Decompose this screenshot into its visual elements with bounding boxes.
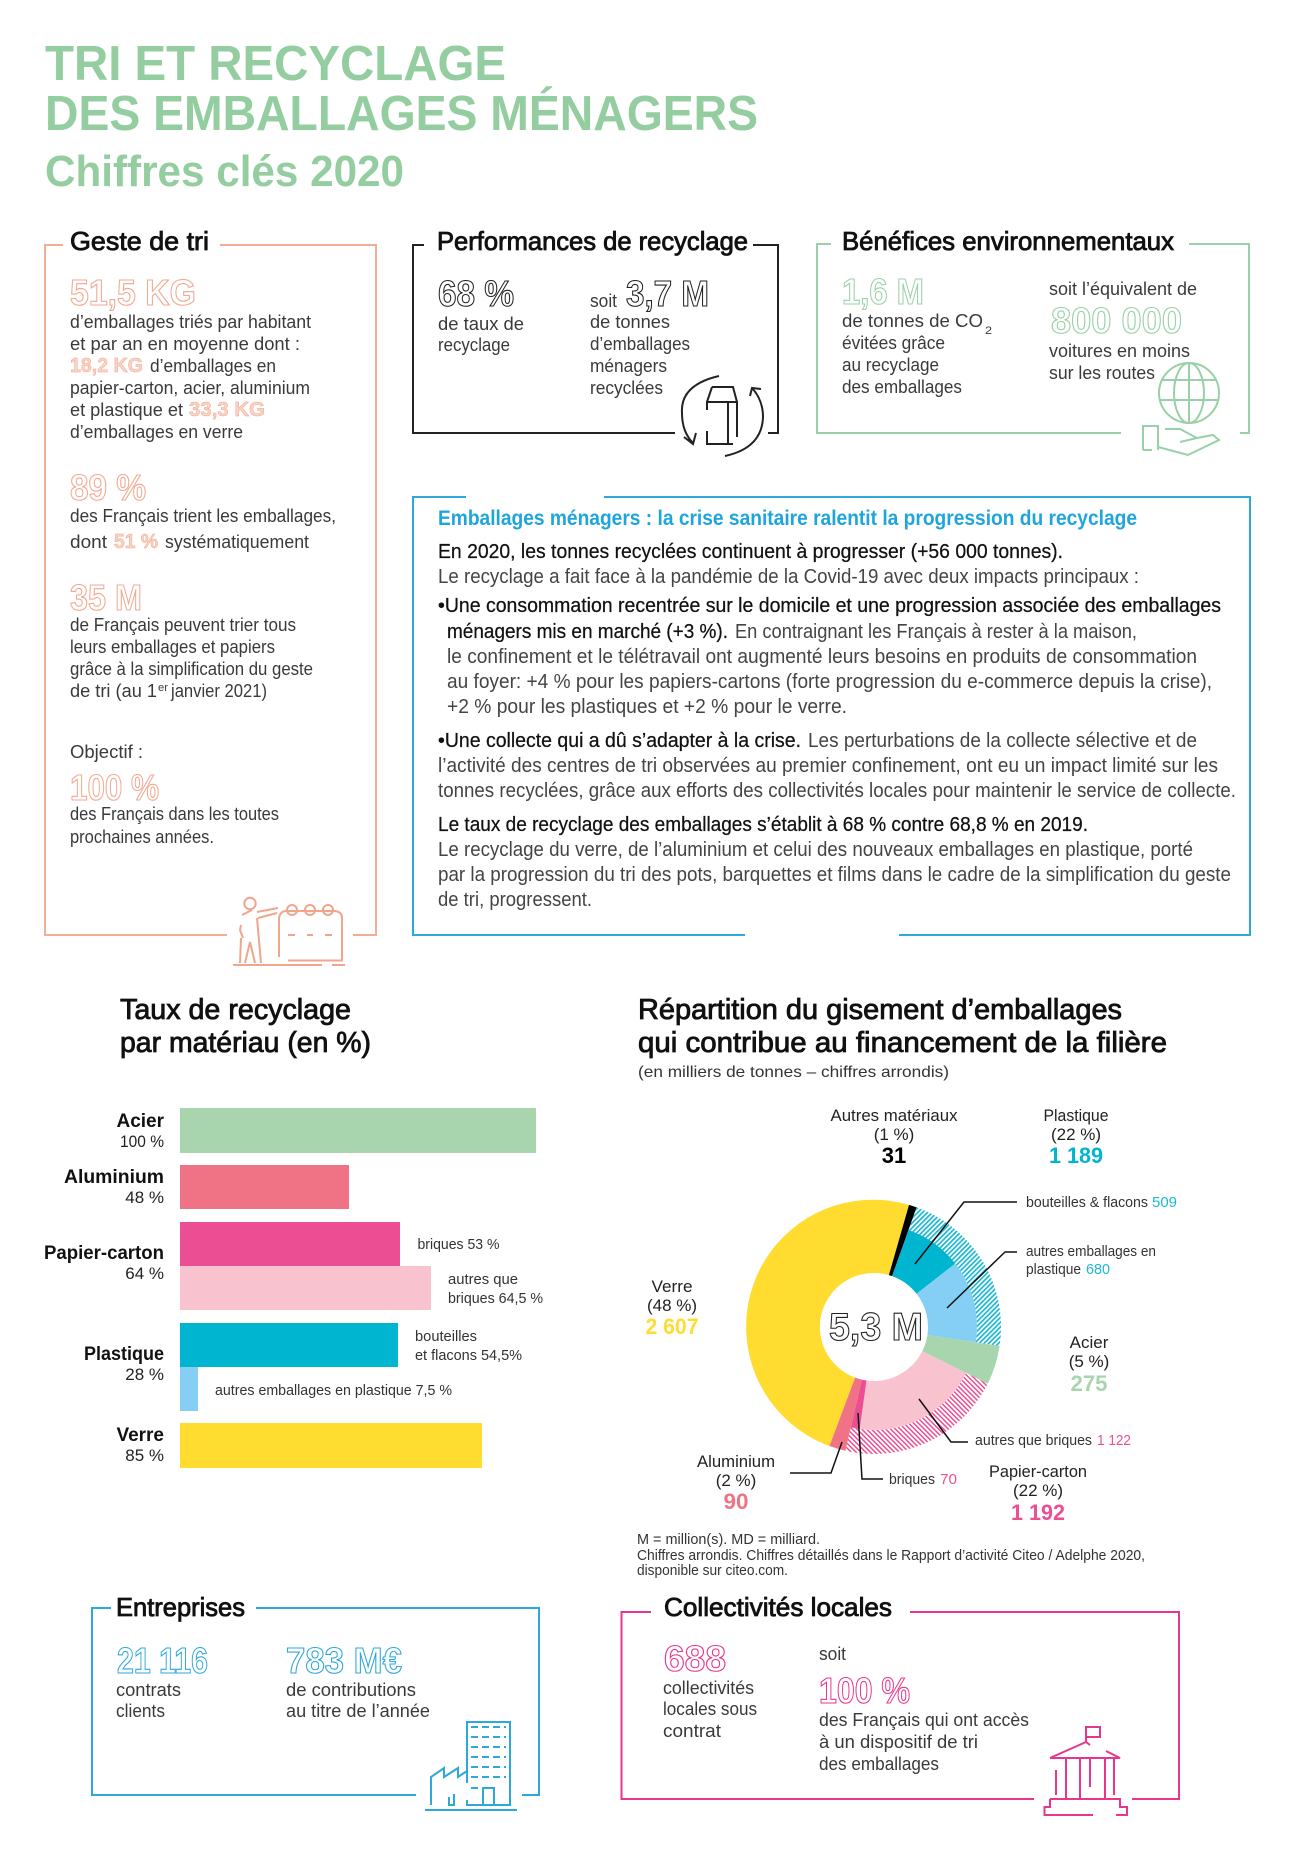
- stat: 51,5 KG: 33,3 KG: [189, 399, 265, 421]
- text block: taux de recyclage: de tri, progressent.: [438, 889, 592, 911]
- label: Verre: Verre: [652, 1277, 692, 1296]
- stat: 35 M: de Français peuvent trier tous: [70, 615, 296, 635]
- icon: office and factory: [425, 1722, 517, 1810]
- label: autres que briques: autres que briques: [975, 1432, 1092, 1449]
- icon: person sorting at a bin: [233, 898, 345, 965]
- bar: Plastique: et flacons 54,5%: [415, 1347, 522, 1364]
- text block: collecte: •Une collecte qui a dû s’adapter à la crise.: [438, 730, 801, 752]
- text block: collecte: l’activité des centres de tri observées au premier confinement, ont eu un impact limité sur les: [438, 755, 1218, 777]
- label: Papier-carton: 1 192: [1011, 1500, 1065, 1525]
- text block: consommation: ménagers mis en marché (+3 %).: [447, 621, 728, 643]
- stat: 35 M: 35 M: [70, 577, 142, 618]
- label: bouteilles et flacons: bouteilles & flacons: [1026, 1194, 1148, 1211]
- stat: 100 %: soit: [819, 1644, 846, 1664]
- label: Plastique: (22 %): [1051, 1125, 1101, 1144]
- panel: Geste de tri: [45, 226, 376, 965]
- stat: 1,6 M: évitées grâce: [842, 333, 945, 353]
- text block: consommation: En contraignant les Français à rester à la maison,: [735, 621, 1137, 643]
- stat: 35 M: grâce à la simplification du geste: [70, 659, 313, 679]
- panel: Bénéfices environnementaux: [817, 226, 1249, 455]
- leader lines: [790, 1202, 1017, 1479]
- stat: 1,6 M: 2: [985, 325, 992, 337]
- heading: taux de recyclage par matériau: par matériau (en %): [120, 1027, 371, 1059]
- stat: 21 116: contrats: [116, 1680, 181, 1700]
- heading: Collectivités locales: Collectivités locales: [664, 1592, 892, 1622]
- label: briques: briques: [889, 1471, 935, 1488]
- stat: 51,5 KG: d’emballages en verre: [70, 422, 243, 442]
- text block: consommation: [438, 595, 1221, 718]
- label: autres emballages en plastique: autres emballages en: [1026, 1243, 1156, 1260]
- heading: Geste de tri: Geste de tri: [70, 226, 209, 256]
- stat: 89 %: 51 %: [114, 531, 158, 553]
- panel: Performances de recyclage: [413, 226, 778, 456]
- stat: 783 M€: 783 M€: [286, 1640, 402, 1681]
- panel: Collectivités locales: [622, 1592, 1179, 1815]
- text block: introduction: En 2020, les tonnes recyclées continuent à progresser (+56 000 tonnes).: [438, 541, 1063, 563]
- stat: 89 %: des Français trient les emballages,: [70, 506, 336, 526]
- stat: 783 M€: [286, 1640, 430, 1721]
- label: Acier: [1069, 1333, 1109, 1396]
- stat: 51,5 KG: papier-carton, acier, aluminium: [70, 378, 310, 398]
- label: autres emballages en plastique: 680: [1086, 1261, 1110, 1278]
- stat: 3,7 M: d’emballages: [590, 334, 690, 354]
- stat: 89 %: 89 %: [70, 467, 146, 508]
- label: autres emballages en plastique: [1026, 1243, 1156, 1278]
- label: Autres matériaux: (1 %): [874, 1125, 914, 1144]
- bar: Acier: Acier: [116, 1111, 165, 1132]
- footnote: Chiffres arrondis. Chiffres détaillés dans le Rapport d’activité Citeo / Adelphe 2020,: [637, 1547, 1145, 1564]
- stat: 21 116: 21 116: [117, 1640, 208, 1681]
- heading: crise sanitaire: Emballages ménagers : la crise sanitaire ralentit la progression du recyclage: [438, 507, 1137, 530]
- bar: Aluminium: 48 %: [125, 1188, 164, 1207]
- stat: 35 M: janvier 2021): [170, 681, 267, 701]
- footnote: [637, 1531, 1145, 1579]
- label: Autres matériaux: 31: [882, 1143, 906, 1168]
- title: TRI ET RECYCLAGE: [45, 37, 506, 91]
- label: Plastique: Plastique: [1044, 1106, 1108, 1125]
- text block: collecte: Les perturbations de la collecte sélective et de: [808, 730, 1197, 752]
- label: Acier: 275: [1070, 1371, 1108, 1396]
- label: Autres matériaux: Autres matériaux: [830, 1106, 958, 1125]
- stat: 35 M: leurs emballages et papiers: [70, 637, 275, 657]
- bar: Plastique: 28 %: [125, 1365, 164, 1384]
- icon: globe in a hand: [1143, 363, 1219, 455]
- donut centre value: 5,3 M: [829, 1306, 923, 1349]
- bar: Aluminium: Aluminium: [64, 1167, 164, 1188]
- label: Verre: 2 607: [646, 1314, 698, 1339]
- bar: Papier-carton: briques 64,5 %: [448, 1290, 543, 1307]
- text block: taux de recyclage: par la progression du tri des pots, barquettes et films dans le cadre de la simplification du geste: [438, 864, 1231, 886]
- bar chart: [44, 1108, 543, 1468]
- label: autres que briques: 1 122: [1097, 1432, 1131, 1449]
- stat: 800 000: voitures en moins: [1049, 341, 1190, 361]
- stat: 68 %: recyclage: [438, 335, 510, 355]
- heading: Entreprises: Entreprises: [116, 1592, 245, 1622]
- label: Aluminium: (2 %): [716, 1471, 756, 1490]
- stat: 3,7 M: [590, 273, 709, 398]
- bar: Plastique: autres emballages en plastique 7,5 %: [215, 1382, 452, 1399]
- stat: objectif 100 %: Objectif :: [70, 742, 143, 762]
- heading: répartition du gisement: [638, 994, 1167, 1081]
- label: autres emballages en plastique: plastique: [1026, 1261, 1081, 1278]
- stat: 51,5 KG: d’emballages en: [150, 356, 276, 376]
- heading: répartition du gisement: (en milliers de tonnes – chiffres arrondis): [638, 1064, 949, 1081]
- stat: 800 000: [1049, 279, 1197, 383]
- bar: Aluminium: [64, 1165, 349, 1209]
- stat: 3,7 M: de tonnes: [590, 312, 670, 332]
- label: Papier-carton: [989, 1462, 1087, 1525]
- bar: Acier: [116, 1108, 536, 1153]
- bar: Plastique: bouteilles: [415, 1328, 477, 1345]
- heading: Performances de recyclage: Performances de recyclage: [437, 226, 748, 256]
- label: Verre: (48 %): [647, 1296, 697, 1315]
- label: Plastique: 1 189: [1049, 1143, 1103, 1168]
- text block: consommation: •Une consommation recentrée sur le domicile et une progression associée des emballages: [438, 595, 1221, 617]
- footnote: M = million(s). MD = milliard.: [637, 1531, 820, 1548]
- bar: Acier: 100 %: [120, 1132, 164, 1151]
- label: Autres matériaux: [830, 1106, 958, 1168]
- stat: objectif 100 %: des Français dans les toutes: [70, 804, 279, 824]
- stat: 800 000: 800 000: [1051, 300, 1182, 341]
- icon: town hall: [1044, 1727, 1127, 1815]
- bar: Papier-carton: Papier-carton: [44, 1243, 164, 1264]
- stat: 800 000: sur les routes: [1049, 363, 1155, 383]
- stat: 89 %: systématiquement: [165, 532, 309, 552]
- stat: 100 %: à un dispositif de tri: [819, 1732, 978, 1752]
- stat: objectif 100 %: prochaines années.: [70, 827, 214, 847]
- heading: Bénéfices environnementaux: Bénéfices environnementaux: [842, 226, 1174, 256]
- label: Aluminium: 90: [724, 1489, 748, 1514]
- stat: 35 M: er: [158, 682, 168, 694]
- bar: Papier-carton: 64 %: [125, 1264, 164, 1283]
- stat: 100 %: 100 %: [819, 1670, 910, 1711]
- text block: collecte: [438, 730, 1236, 802]
- stat: 688: locales sous: [663, 1699, 757, 1719]
- stat: 800 000: soit l’équivalent de: [1049, 279, 1197, 299]
- stat: 1,6 M: de tonnes de CO: [842, 311, 983, 331]
- stat: 68 %: de taux de: [438, 314, 524, 334]
- heading: taux de recyclage par matériau: [120, 994, 371, 1059]
- stat: 51,5 KG: [70, 272, 311, 442]
- label: Papier-carton: (22 %): [1013, 1481, 1063, 1500]
- stat: 89 %: [70, 467, 336, 553]
- text block: introduction: [438, 541, 1139, 588]
- footnote: disponible sur citeo.com.: [637, 1562, 788, 1579]
- stat: 3,7 M: ménagers: [590, 356, 667, 376]
- bar: Verre: 85 %: [125, 1446, 164, 1465]
- heading: répartition du gisement: qui contribue au financement de la filière: [638, 1027, 1167, 1059]
- bar: Verre: Verre: [116, 1425, 164, 1446]
- stat: 68 %: [438, 273, 524, 355]
- stat: 100 %: des emballages: [819, 1754, 939, 1774]
- stat: 783 M€: au titre de l’année: [286, 1701, 430, 1721]
- label: Aluminium: Aluminium: [697, 1452, 775, 1471]
- label: Verre: [646, 1277, 698, 1339]
- stat: 21 116: clients: [116, 1701, 165, 1721]
- text block: introduction: Le recyclage a fait face à la pandémie de la Covid-19 avec deux impacts principaux :: [438, 566, 1139, 588]
- stat: 3,7 M: 3,7 M: [626, 273, 709, 314]
- stat: 51,5 KG: 18,2 KG: [70, 355, 143, 377]
- bar: Papier-carton: [44, 1222, 543, 1310]
- stat: 688: [663, 1638, 757, 1741]
- stat: 68 %: 68 %: [438, 273, 514, 314]
- title: Chiffres clés 2020: [45, 147, 404, 196]
- text block: consommation: au foyer: +4 % pour les papiers-cartons (forte progression du e-commerce depuis la crise),: [447, 671, 1212, 693]
- heading: répartition du gisement: Répartition du gisement d’emballages: [638, 994, 1122, 1026]
- stat: 1,6 M: des emballages: [842, 377, 962, 397]
- bar: Plastique: Plastique: [84, 1344, 164, 1365]
- label: Plastique: [1044, 1106, 1108, 1168]
- text block: taux de recyclage: [438, 814, 1231, 911]
- stat: 100 %: des Français qui ont accès: [819, 1710, 1029, 1730]
- bar: Plastique: [84, 1323, 522, 1411]
- stat: 89 %: dont: [70, 532, 107, 552]
- stat: 51,5 KG: et par an en moyenne dont :: [70, 334, 300, 354]
- stat: 51,5 KG: d’emballages triés par habitant: [70, 312, 311, 332]
- title: DES EMBALLAGES MÉNAGERS: [45, 87, 758, 141]
- stat: 35 M: de tri (au 1: [70, 681, 157, 701]
- donut chart: [746, 1200, 1017, 1479]
- stat: 3,7 M: recyclées: [590, 378, 663, 398]
- label: Aluminium: [697, 1452, 775, 1514]
- text block: taux de recyclage: Le recyclage du verre, de l’aluminium et celui des nouveaux emballages en plastique, porté: [438, 839, 1193, 861]
- stat: 51,5 KG: 51,5 KG: [70, 272, 196, 313]
- bar: Papier-carton: autres que: [448, 1271, 518, 1288]
- stat: objectif 100 %: [70, 742, 279, 847]
- heading: taux de recyclage par matériau: Taux de recyclage: [120, 994, 351, 1026]
- label: bouteilles et flacons: 509: [1152, 1194, 1177, 1211]
- title: [45, 37, 758, 196]
- stat: 688: collectivités: [663, 1678, 754, 1698]
- donut labels: [646, 1106, 1177, 1525]
- stat: 1,6 M: 1,6 M: [842, 271, 924, 312]
- text block: consommation: le confinement et le télétravail ont augmenté leurs besoins en produits de consommation: [447, 646, 1197, 668]
- label: Papier-carton: Papier-carton: [989, 1462, 1087, 1481]
- text block: consommation: +2 % pour les plastiques et +2 % pour le verre.: [447, 696, 847, 718]
- stat: 1,6 M: [842, 271, 992, 397]
- stat: 3,7 M: soit: [590, 291, 617, 311]
- bar: Verre: [116, 1423, 482, 1468]
- text block: collecte: tonnes recyclées, grâce aux efforts des collectivités locales pour maintenir le service de collecte.: [438, 780, 1236, 802]
- stat: 688: 688: [664, 1638, 726, 1679]
- label: Acier: Acier: [1070, 1333, 1109, 1352]
- label: briques: 70: [940, 1471, 957, 1488]
- stat: 688: contrat: [663, 1721, 721, 1741]
- stat: 1,6 M: au recyclage: [842, 355, 939, 375]
- stat: objectif 100 %: 100 %: [70, 767, 159, 808]
- stat: 21 116: [116, 1640, 208, 1721]
- panel: Entreprises: [92, 1592, 539, 1810]
- bar: Papier-carton: briques 53 %: [418, 1236, 500, 1253]
- stat: 35 M: [70, 577, 313, 701]
- text block: taux de recyclage: Le taux de recyclage des emballages s’établit à 68 % contre 68,8 % en 2019.: [438, 814, 1088, 836]
- label: Acier: (5 %): [1069, 1352, 1109, 1371]
- panel: crise sanitaire: [413, 497, 1250, 935]
- stat: 100 %: [819, 1644, 1029, 1774]
- stat: 51,5 KG: et plastique et: [70, 400, 183, 420]
- icon: recycling carton: [682, 376, 763, 456]
- stat: 783 M€: de contributions: [286, 1680, 416, 1700]
